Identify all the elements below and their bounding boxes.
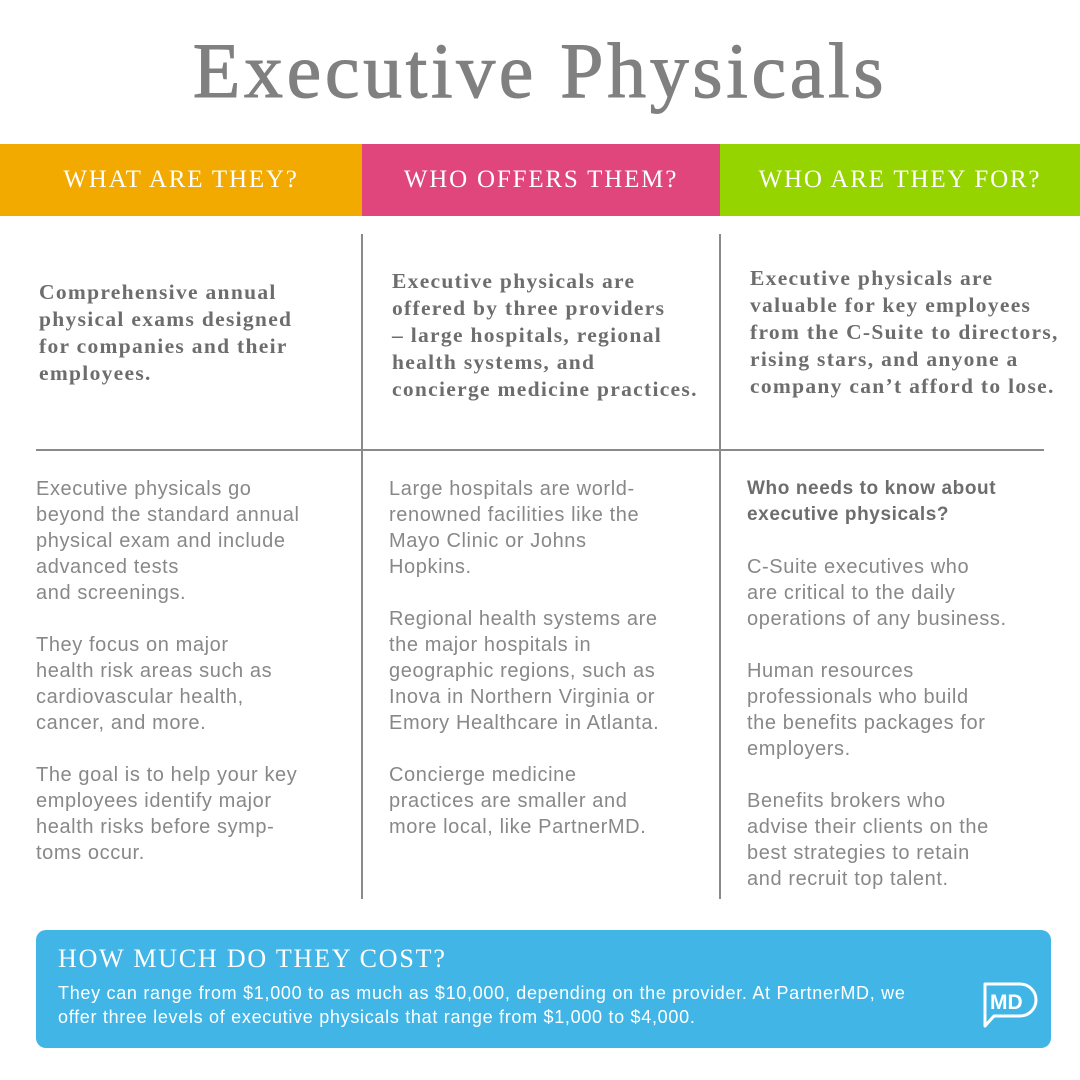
header: who offers them bbox=[362, 144, 720, 216]
intro: what are they: employees. bbox=[39, 361, 152, 385]
body: who are they for: Who needs to know about bbox=[747, 478, 996, 499]
intro: what are they: for companies and their bbox=[39, 334, 288, 358]
body: who offers them: the major hospitals in bbox=[389, 634, 591, 656]
body: who offers them: geographic regions, such as bbox=[389, 660, 655, 682]
body: who are they for: Human resources bbox=[747, 660, 914, 682]
body: what are they: beyond the standard annual bbox=[36, 504, 300, 526]
body: what are they bbox=[36, 478, 300, 864]
body: who are they for: the benefits packages for bbox=[747, 712, 985, 734]
header: who offers them: WHO OFFERS THEM? bbox=[404, 166, 678, 193]
intro: who offers them: concierge medicine practices. bbox=[392, 377, 698, 401]
intro: what are they: physical exams designed bbox=[39, 307, 292, 331]
cost text bbox=[58, 983, 906, 1027]
intro: what are they: Comprehensive annual bbox=[39, 280, 277, 304]
body: who offers them: Concierge medicine bbox=[389, 764, 577, 786]
header: what are they: WHAT ARE THEY? bbox=[63, 166, 299, 193]
body: what are they: cardiovascular health, bbox=[36, 686, 244, 708]
title: Executive Physicals bbox=[193, 27, 887, 114]
body: what are they: physical exam and include bbox=[36, 530, 286, 552]
body: who offers them: renowned facilities like the bbox=[389, 504, 639, 526]
intro: who offers them bbox=[392, 269, 698, 401]
header: who are they for: WHO ARE THEY FOR? bbox=[759, 166, 1041, 193]
body: who are they for: executive physicals? bbox=[747, 504, 949, 525]
body: who are they for: operations of any business. bbox=[747, 608, 1007, 630]
body: who are they for: employers. bbox=[747, 738, 851, 760]
body: who are they for: advise their clients on the bbox=[747, 816, 989, 838]
cost text: They can range from $1,000 to as much as $10,000, depending on the provider. At PartnerMD, we bbox=[58, 983, 906, 1003]
body: who are they for: Benefits brokers who bbox=[747, 790, 946, 812]
header: what are they bbox=[0, 144, 362, 216]
body: who offers them: Emory Healthcare in Atlanta. bbox=[389, 712, 659, 734]
body: who are they for: best strategies to retain bbox=[747, 842, 970, 864]
cost panel bbox=[36, 930, 1051, 1048]
body: what are they: They focus on major bbox=[36, 634, 229, 656]
intro: who are they for: valuable for key employees bbox=[750, 293, 1031, 317]
body: who offers them: Inova in Northern Virginia or bbox=[389, 686, 655, 708]
body: who offers them: more local, like PartnerMD. bbox=[389, 816, 646, 838]
cost text: offer three levels of executive physicals that range from $1,000 to $4,000. bbox=[58, 1007, 696, 1027]
header: who are they for bbox=[720, 144, 1080, 216]
body: what are they: advanced tests bbox=[36, 556, 179, 578]
body: what are they: toms occur. bbox=[36, 842, 145, 864]
body: what are they: health risk areas such as bbox=[36, 660, 272, 682]
body: who offers them: Hopkins. bbox=[389, 556, 472, 578]
body: who are they for: and recruit top talent. bbox=[747, 868, 949, 890]
body: who offers them bbox=[389, 478, 659, 838]
intro: who are they for: rising stars, and anyone a bbox=[750, 347, 1019, 371]
icon: MD logo: MD bbox=[990, 991, 1023, 1014]
intro: who are they for bbox=[750, 266, 1059, 398]
body: what are they: Executive physicals go bbox=[36, 478, 252, 500]
intro: who offers them: Executive physicals are bbox=[392, 269, 635, 293]
intro: who offers them: health systems, and bbox=[392, 350, 595, 374]
cost heading: HOW MUCH DO THEY COST? bbox=[58, 944, 447, 973]
body: what are they: cancer, and more. bbox=[36, 712, 206, 734]
intro: who are they for: Executive physicals are bbox=[750, 266, 993, 290]
body: what are they: The goal is to help your key bbox=[36, 764, 297, 786]
body: who offers them: Regional health systems are bbox=[389, 608, 658, 630]
intro: who offers them: offered by three providers bbox=[392, 296, 665, 320]
body: who are they for: professionals who build bbox=[747, 686, 969, 708]
body: what are they: health risks before symp- bbox=[36, 816, 274, 838]
body: who are they for bbox=[747, 478, 1007, 890]
body: who offers them: Mayo Clinic or Johns bbox=[389, 530, 587, 552]
body: what are they: employees identify major bbox=[36, 790, 272, 812]
body: who offers them: practices are smaller and bbox=[389, 790, 627, 812]
body: who are they for: C-Suite executives who bbox=[747, 556, 969, 578]
icon: MD logo bbox=[984, 982, 1038, 1028]
body: who offers them: Large hospitals are world- bbox=[389, 478, 635, 500]
intro: who are they for: from the C-Suite to directors, bbox=[750, 320, 1059, 344]
intro: who offers them: – large hospitals, regional bbox=[392, 323, 662, 347]
intro: what are they bbox=[39, 280, 292, 385]
body: what are they: and screenings. bbox=[36, 582, 186, 604]
intro: who are they for: company can’t afford to lose. bbox=[750, 374, 1055, 398]
body: who are they for: are critical to the daily bbox=[747, 582, 955, 604]
